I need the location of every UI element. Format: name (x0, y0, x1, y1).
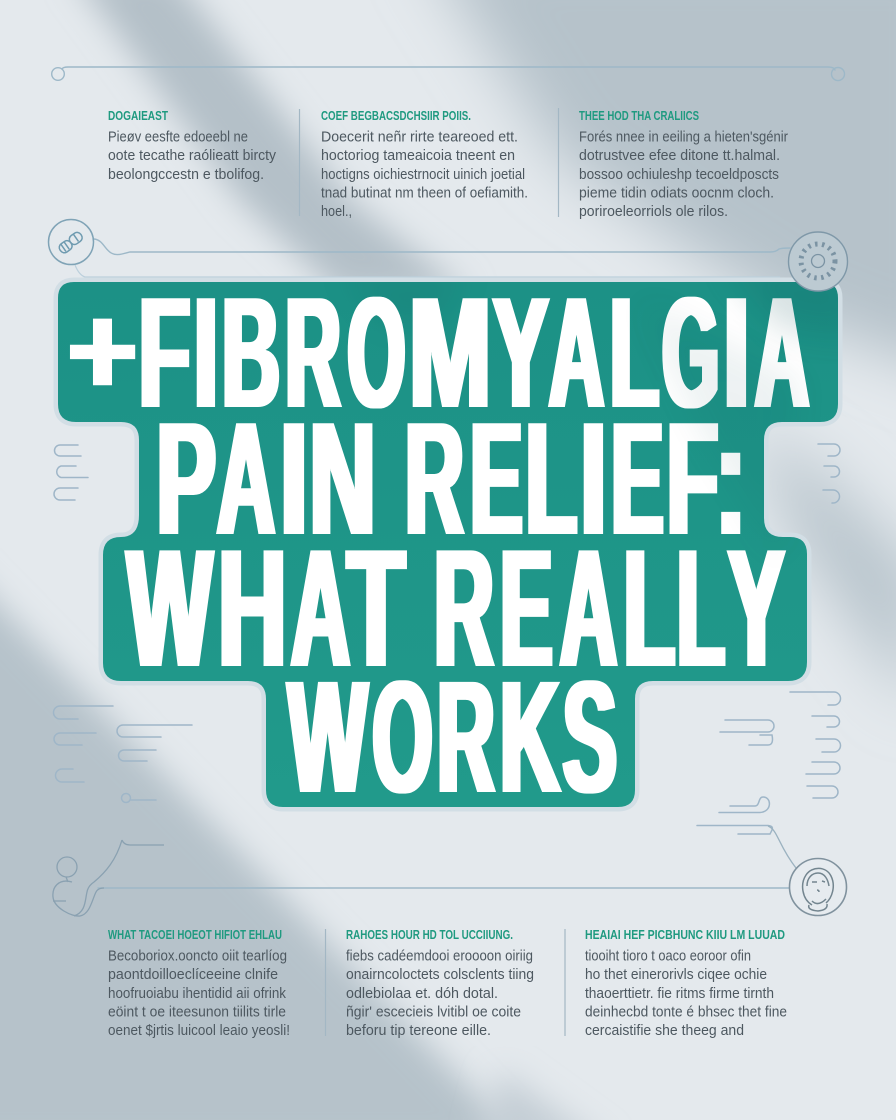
text block: top left: beolongccestn e tbolifog. (108, 167, 264, 183)
text block: top centre (321, 108, 528, 220)
title text: A (549, 265, 604, 441)
squiggles: left upper (54, 445, 88, 500)
upper connector line with circles (75, 239, 790, 277)
title text: L (624, 514, 675, 702)
title panel (58, 260, 860, 826)
text block: top centre: Doecerit neñr rirte teareoed ett. (321, 130, 518, 146)
text block: top right: Forés nnee in eeiling a hieten'sgénir (579, 130, 788, 146)
title text: A (560, 514, 617, 702)
title text: T (347, 514, 405, 702)
icon: pills (48, 220, 94, 264)
title text: I (724, 265, 749, 441)
title text: M (409, 265, 491, 441)
text block: bottom centre: RAHOES HOUR HD TOL UCCIIUNG. (346, 927, 513, 942)
title text: E (500, 514, 552, 702)
title text: L (526, 389, 577, 569)
icon: person outline (53, 840, 164, 916)
text block: bottom left: eöint t oe iteesunon tiilits tirle (108, 1004, 286, 1020)
title text: R (285, 265, 341, 441)
text block: bottom right: HEAIAI HEF PICBHUNC KIIU LM LUUAD (585, 927, 785, 942)
text block: bottom right: cercaistifie she theeg and (585, 1023, 744, 1039)
text block: bottom left: Becoboriox.ooncto oiit tearlíog (108, 948, 287, 964)
title text: R (437, 647, 495, 826)
text block: bottom centre: ñgir' escecieis lvitibl oe coite (346, 1004, 521, 1020)
text block: top right: bossoo ochiuleshp tecoeldposcts (579, 167, 779, 183)
title text: Y (493, 265, 549, 441)
text block: bottom left: WHAT TACOEI HOEOT HIFIOT EHLAU (108, 927, 282, 942)
text block: top left: Pieøv eesfte edoeebl ne (108, 130, 248, 146)
title text: E (470, 389, 522, 569)
text block: top left (108, 108, 277, 183)
title text: O (373, 647, 432, 826)
text block: bottom centre: beforu tip tereone eille. (346, 1023, 491, 1039)
title text: A (291, 514, 350, 702)
title text: O (348, 265, 405, 441)
title text: E (611, 389, 664, 569)
text block: bottom right (585, 927, 787, 1039)
title text: G (662, 265, 719, 441)
divider (564, 929, 566, 1036)
squiggles: left lower (54, 706, 192, 802)
text block: top centre: hoel., (321, 204, 352, 220)
text block: bottom left (108, 927, 290, 1039)
top connector line (52, 67, 844, 80)
text block: top left: oote tecathe raólieatt bircty (108, 148, 277, 164)
divider (324, 929, 326, 1036)
text block: top centre: hoctigns oichiestrnocit uinich joetial (321, 167, 525, 183)
text block: bottom right: deinhecbd tonte é bhsec thet fine (585, 1004, 787, 1020)
title text: P (156, 389, 216, 569)
text block: bottom centre: fiebs cadéemdooi eroooon oiriig (346, 948, 533, 964)
title text: : (715, 389, 746, 569)
text block: top right: poriroeleorriols ole rilos. (579, 204, 728, 220)
title text: R (434, 514, 494, 702)
text block: bottom left: hoofruoiabu ihentidid aii ofrink (108, 986, 287, 1002)
title text: F (667, 389, 718, 569)
text block: top right: pieme tidin odiats oocnm cloch. (579, 186, 774, 202)
text block: top right: dotrustvee efee ditone tt.halmal. (579, 148, 780, 164)
text block: top centre: tnad butinat nm theen of oefiamith. (321, 186, 528, 202)
title text: + (68, 276, 137, 424)
title text: R (405, 389, 464, 569)
title text: I (194, 265, 218, 441)
text block: bottom right: tiooiht tioro t oaco eoroor ofin (585, 948, 751, 964)
title text: Y (728, 514, 785, 702)
shadow over title (662, 282, 838, 475)
title text: B (222, 265, 280, 441)
text block: bottom left: paontdoilloeclíceeine clnife (108, 967, 278, 983)
divider (558, 108, 560, 217)
text block: top left: DOGAIEAST (108, 108, 168, 123)
text block: bottom centre: onairncoloctets colsclents tiing (346, 967, 534, 983)
text block: bottom right: ho thet einerorivls ciqee ochie (585, 967, 767, 983)
text block: top right (579, 108, 788, 220)
squiggles: right lower (697, 692, 840, 834)
title text (68, 265, 809, 826)
title text: W (288, 647, 367, 826)
text block: bottom centre: odlebiolaa et. dóh dotal. (346, 986, 498, 1002)
title text: I (580, 389, 606, 569)
title text: L (610, 265, 659, 441)
shadow on panel (340, 270, 470, 330)
title text: F (139, 265, 190, 441)
icon: face portrait (790, 858, 846, 916)
title text: W (127, 514, 213, 702)
title text: S (563, 647, 617, 826)
text block: top centre: COEF BEGBACSDCHSIIR POIIS. (321, 108, 471, 123)
lower connector line (98, 826, 796, 888)
title panel: A (755, 265, 809, 441)
squiggles: right upper (818, 444, 840, 503)
text block: top centre: hoctoriog tameaicoia tneent en (321, 148, 515, 164)
divider (298, 109, 300, 216)
text block: bottom left: oenet $jrtis luicool leaio yeosli! (108, 1023, 290, 1039)
title text: K (500, 647, 560, 826)
title text: L (677, 514, 725, 702)
text block: top right: THEE HOD THA CRALIICS (579, 108, 699, 123)
title text: H (218, 514, 287, 702)
text block: bottom centre (346, 927, 534, 1039)
title text: I (280, 389, 308, 569)
title text: A (217, 389, 275, 569)
text block: bottom right: thaoerttietr. fie ritms firme tirnth (585, 986, 774, 1002)
title text: N (310, 389, 376, 569)
icon: badge (788, 232, 848, 291)
